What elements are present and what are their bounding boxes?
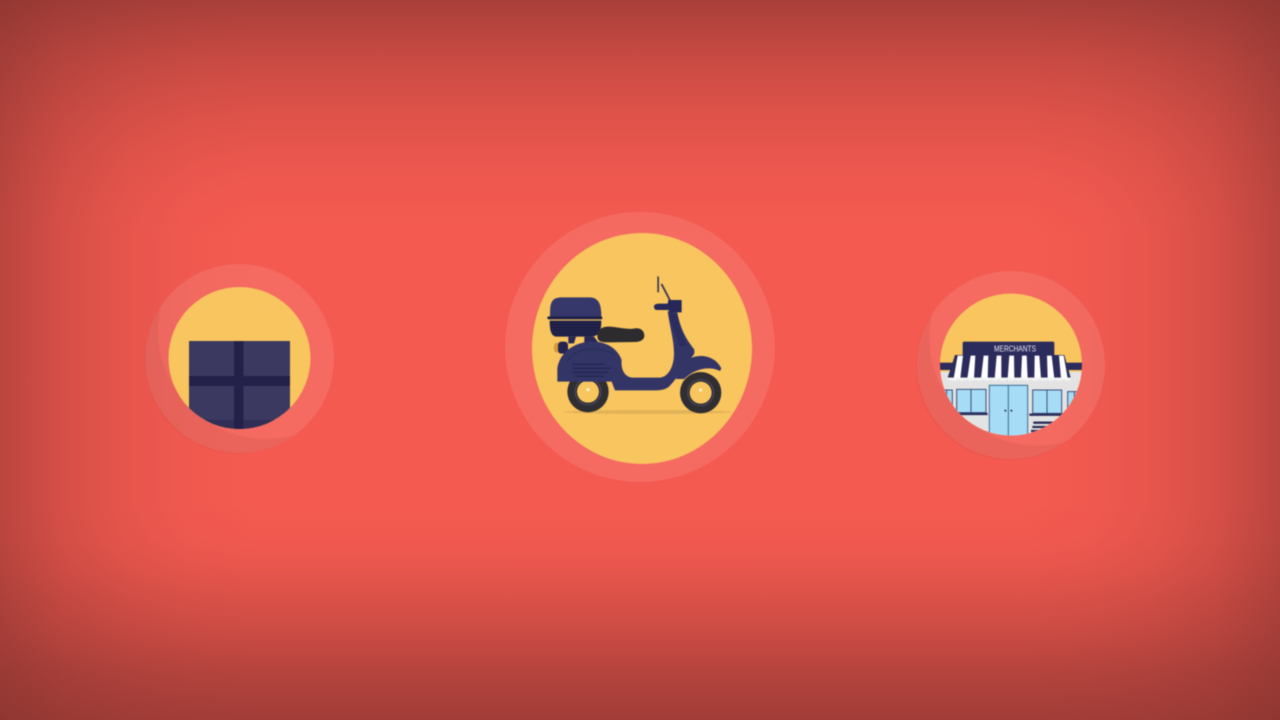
awning valance [948, 378, 1071, 381]
yellow disc [940, 294, 1082, 436]
outer ring [917, 271, 1105, 459]
sills [958, 412, 1062, 417]
top case [550, 297, 601, 317]
scooter body [557, 311, 694, 390]
rack [568, 337, 598, 343]
outer ring [145, 264, 334, 453]
ground shadow [564, 410, 732, 414]
rear panel highlight [567, 349, 615, 362]
yellow disc [168, 287, 310, 429]
steering column shade [668, 313, 687, 347]
storefront [938, 342, 1083, 438]
icon: parcel circle [146, 264, 334, 453]
sign text: MERCHANTS [994, 344, 1036, 354]
mirror and stem [657, 276, 671, 302]
front wheel [680, 372, 721, 413]
windows [942, 389, 1080, 413]
seat [597, 327, 644, 342]
handlebar [654, 300, 682, 312]
ring shadow [916, 318, 1061, 460]
side vents [572, 364, 611, 376]
awning [948, 355, 1071, 378]
ring shadow [146, 312, 290, 453]
doors [989, 385, 1028, 437]
front fender [676, 356, 721, 379]
merchants sign [963, 342, 1054, 356]
tail light [554, 343, 560, 353]
icon: scooter circle [505, 212, 775, 482]
parcel box [189, 341, 290, 436]
side fascia [938, 363, 1083, 370]
bench [1031, 423, 1055, 431]
yellow disc [532, 233, 752, 464]
outer ring [505, 212, 775, 482]
icon: merchant store circle [916, 271, 1105, 460]
wall [938, 372, 1083, 438]
rear wheel [567, 371, 609, 412]
scooter [547, 276, 732, 414]
